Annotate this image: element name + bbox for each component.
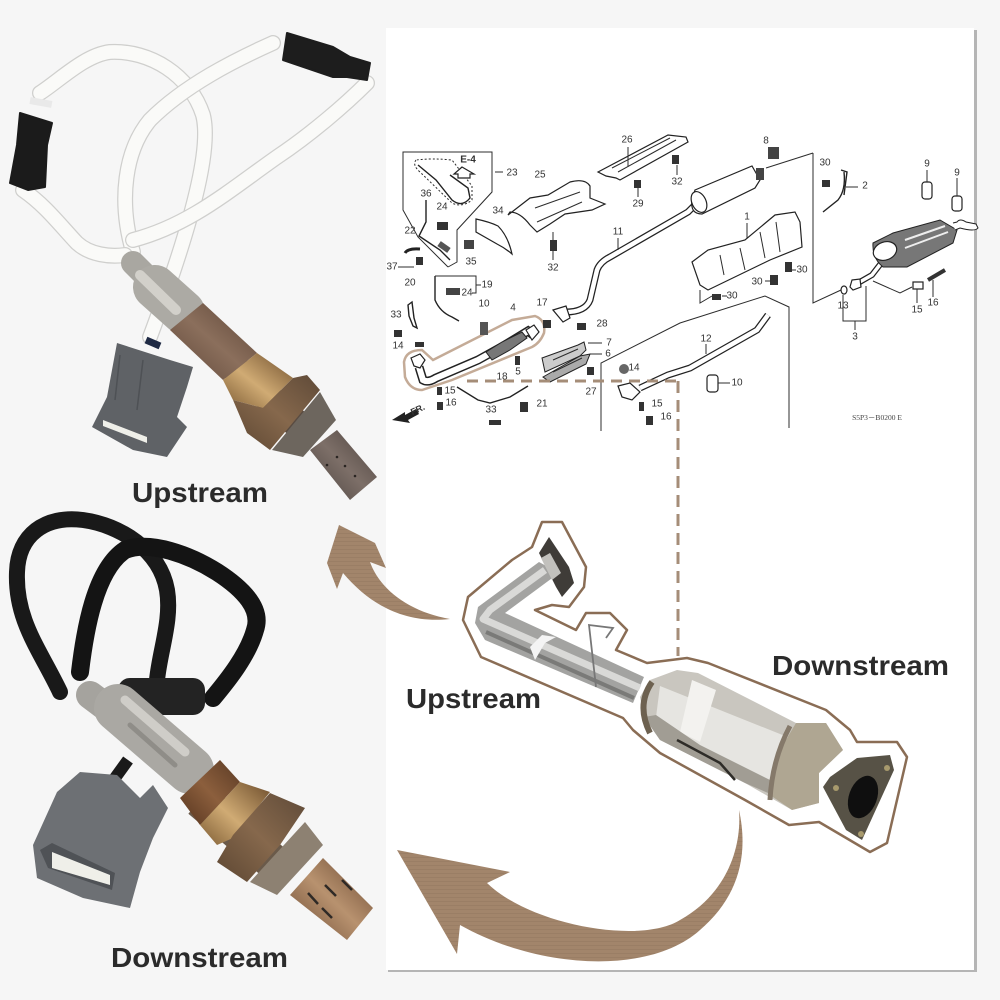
part number labels: 15 — [444, 386, 456, 397]
black wires — [17, 519, 257, 698]
part number labels: 33 — [390, 310, 402, 321]
part 1 heat shield — [692, 212, 802, 303]
downstream label left: Downstream — [111, 942, 288, 973]
part number labels — [386, 135, 960, 423]
part number labels: 17 — [536, 298, 548, 309]
part number labels: 5 — [515, 367, 521, 378]
part number labels: 35 — [465, 257, 477, 268]
sensor body — [165, 305, 315, 440]
pipe — [475, 562, 644, 703]
part number labels: 24 — [436, 202, 448, 213]
part number labels: 30 — [726, 291, 738, 302]
part 34 heat shield — [476, 219, 512, 254]
part 20 bracket — [408, 302, 417, 328]
part number labels: 26 — [621, 135, 633, 146]
part number labels: 33 — [485, 405, 497, 416]
part 4 front pipe with converter — [411, 325, 539, 381]
part number labels: 14 — [628, 363, 640, 374]
bracket — [589, 625, 613, 687]
part number labels: 21 — [536, 399, 548, 410]
part number labels: 11 — [613, 227, 624, 238]
part number labels: 36 — [420, 189, 432, 200]
part 18 sensor — [457, 386, 528, 403]
part number labels: 4 — [510, 303, 516, 314]
part 32 bolt — [550, 232, 557, 260]
highlight outline around pipe — [404, 316, 544, 390]
part number labels: 6 — [605, 349, 611, 360]
arrow: curved to downstream sensor — [397, 810, 743, 961]
part number labels: 20 — [404, 278, 416, 289]
part number labels: 18 — [496, 372, 508, 383]
part number labels: 1 — [744, 212, 750, 223]
part 19 sensor — [435, 276, 481, 321]
part number labels: 13 — [837, 301, 849, 312]
part number labels: 24 — [461, 288, 473, 299]
part number labels: E-4 — [460, 155, 476, 166]
part number labels: 14 — [392, 341, 404, 352]
part number labels: 32 — [671, 177, 683, 188]
rear muffler — [841, 220, 978, 330]
downstream label on pipe: Downstream — [772, 650, 949, 681]
inlet flange — [539, 537, 574, 597]
part 25 heat shield — [508, 181, 605, 232]
part 11 pipe — [553, 200, 700, 322]
sensor body — [200, 800, 285, 872]
part number labels: 27 — [585, 387, 597, 398]
dashed connector line — [467, 381, 678, 656]
part number labels: 19 — [481, 280, 493, 291]
part number labels: 16 — [660, 412, 672, 423]
part number labels: 12 — [700, 334, 712, 345]
part number labels: S5P3－B0200 E — [852, 413, 902, 422]
wire ends — [146, 340, 160, 346]
arrow: curved to upstream sensor — [327, 525, 450, 620]
connector — [92, 343, 193, 457]
fr arrow — [392, 409, 419, 423]
part number labels: 30 — [751, 277, 763, 288]
part number labels: 8 — [763, 136, 769, 147]
part 26 heat shield — [598, 135, 688, 180]
part number labels: 37 — [386, 262, 398, 273]
part number labels: 16 — [445, 398, 457, 409]
part 35 bolt — [464, 240, 474, 249]
divider line — [813, 153, 841, 303]
upstream label left: Upstream — [132, 477, 268, 508]
catalytic converter photo — [463, 522, 907, 852]
part number labels: 7 — [606, 338, 612, 349]
part number labels: 9 — [954, 168, 960, 179]
part number labels: 30 — [819, 158, 831, 169]
small fasteners — [394, 320, 653, 425]
parts 7 and 6 converters — [542, 342, 602, 382]
connector — [33, 772, 168, 908]
black wire stub — [115, 760, 128, 778]
black sleeve — [118, 678, 205, 715]
outlet flange — [823, 755, 894, 840]
upstream sensor photo — [10, 33, 377, 500]
part 9 rubber mounts — [922, 170, 962, 211]
upstream label on pipe: Upstream — [406, 683, 541, 714]
part number labels: 34 — [492, 206, 504, 217]
part 2 hanger — [822, 170, 858, 212]
part 12 pipe section — [601, 296, 789, 431]
black sleeves — [10, 33, 370, 190]
middle muffler — [688, 147, 813, 215]
part number labels: 15 — [651, 399, 663, 410]
part number labels: 15 — [911, 305, 923, 316]
panel: exhaust diagram sheet — [386, 28, 977, 972]
part number labels: 29 — [632, 199, 644, 210]
part number labels: 32 — [547, 263, 559, 274]
parts diagram — [386, 135, 978, 431]
downstream sensor photo — [17, 519, 373, 940]
part group 23 oxygen sensor box — [398, 152, 503, 267]
part number labels: 22 — [404, 226, 416, 237]
part number labels: 23 — [506, 168, 518, 179]
white wires — [23, 43, 367, 337]
part number labels: 28 — [596, 319, 608, 330]
part number labels: 10 — [731, 378, 743, 389]
part number labels: 3 — [852, 332, 858, 343]
part number labels: 16 — [927, 298, 939, 309]
part number labels: 10 — [478, 299, 490, 310]
part number labels: 2 — [862, 181, 868, 192]
label band — [530, 635, 556, 660]
part number labels: 30 — [796, 265, 808, 276]
sticker outline — [463, 522, 907, 852]
part number labels: 25 — [534, 170, 546, 181]
part number labels: FR. — [409, 402, 426, 417]
converter body — [640, 670, 843, 810]
part number labels: 9 — [924, 159, 930, 170]
